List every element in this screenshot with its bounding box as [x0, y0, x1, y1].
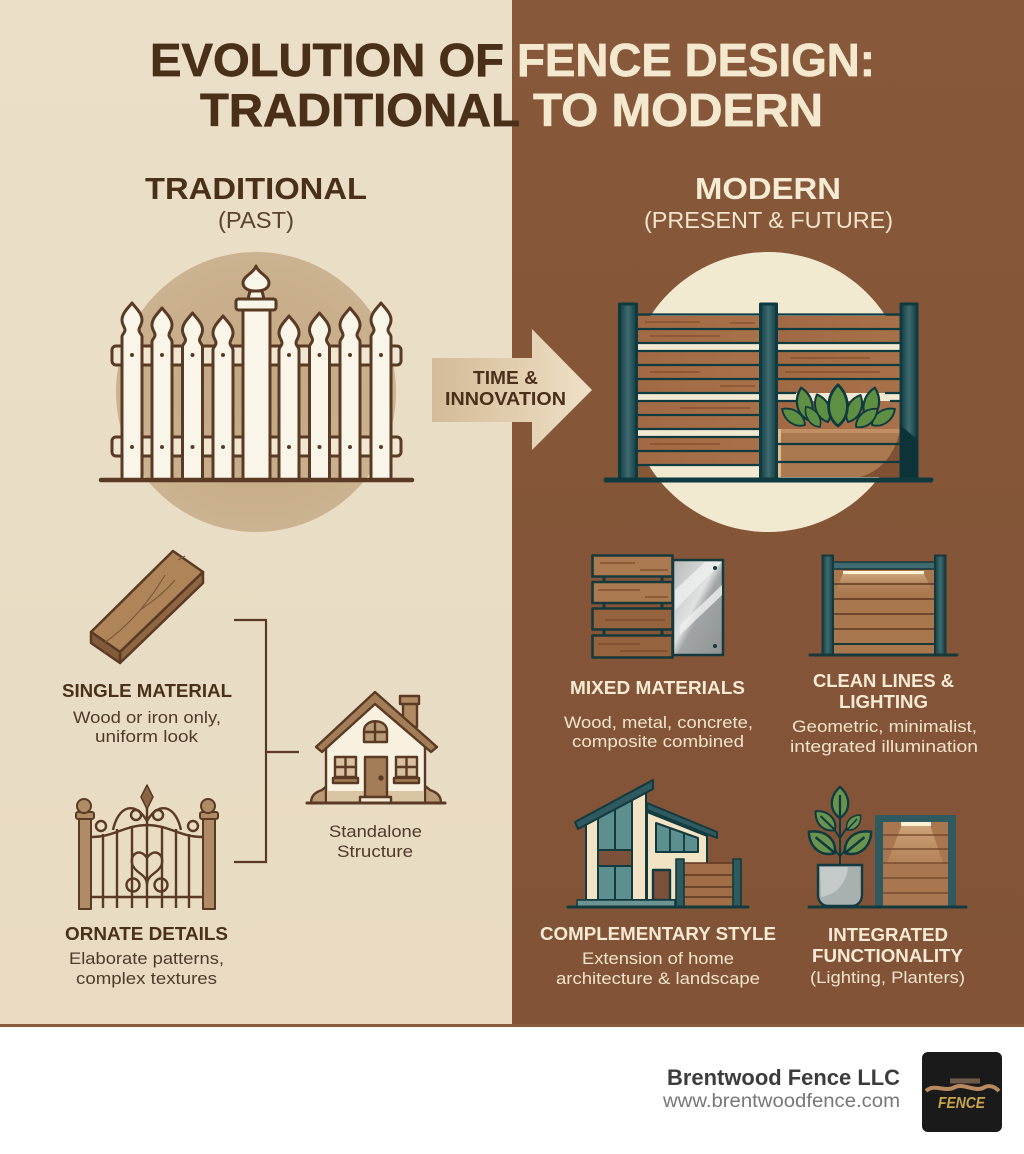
title	[150, 34, 875, 136]
heading: modern	[644, 171, 893, 233]
planks grain	[645, 322, 880, 444]
label: standalone structure: Structure	[337, 843, 413, 861]
heading: traditional: (PAST)	[218, 207, 294, 233]
title: EVOLUTION OF	[150, 34, 504, 86]
icon: clean lines and lighting	[810, 556, 957, 655]
bracket connector	[234, 620, 299, 862]
plant leaves	[778, 385, 899, 432]
title: TRADITIONAL	[200, 84, 520, 136]
label: single material: Wood or iron only,	[73, 709, 221, 727]
label: single material	[62, 680, 232, 746]
arrow: time and innovation: TIME &	[473, 368, 538, 388]
wood slats	[636, 316, 901, 465]
panel: traditional background	[0, 0, 512, 1025]
title: FENCE DESIGN:	[517, 34, 875, 86]
pickets	[122, 266, 391, 480]
footer: logo	[922, 1052, 1002, 1132]
arrow: time and innovation	[432, 329, 592, 450]
arrow: time and innovation: INNOVATION	[445, 389, 566, 409]
posts	[620, 304, 917, 479]
illustration: traditional picket fence	[101, 252, 412, 532]
icon: ornate gate	[76, 785, 218, 909]
slat rails	[636, 314, 901, 465]
heading: modern: (PRESENT & FUTURE)	[644, 207, 893, 233]
label: standalone structure	[329, 823, 422, 861]
icon: modern house	[568, 780, 748, 907]
title: TO MODERN	[533, 84, 823, 136]
label: mixed materials	[564, 677, 753, 751]
icon: traditional house	[307, 692, 445, 803]
rails	[112, 346, 401, 456]
icon: wood plank	[91, 551, 203, 663]
footer background	[0, 1027, 1024, 1154]
label: ornate details	[65, 923, 228, 988]
label: complementary style: COMPLEMENTARY STYLE	[540, 923, 776, 944]
icon: planter and lit fence	[803, 787, 966, 907]
label: clean lines and lighting: LIGHTING	[839, 691, 928, 712]
label: integrated functionality	[810, 924, 965, 987]
footer: company name: www.brentwoodfence.com	[662, 1091, 900, 1112]
central post	[243, 310, 270, 480]
label: ornate details: complex textures	[76, 970, 217, 988]
heading: traditional: TRADITIONAL	[145, 171, 367, 206]
label: clean lines and lighting: integrated illumination	[790, 738, 978, 756]
label: integrated functionality: (Lighting, Planters)	[810, 969, 965, 987]
label: ornate details: ORNATE DETAILS	[65, 923, 228, 944]
heading: traditional	[145, 171, 367, 233]
label: integrated functionality: INTEGRATED	[828, 924, 948, 945]
footer: company name: Brentwood Fence LLC	[667, 1065, 900, 1090]
footer: logo: FENCE	[938, 1095, 986, 1112]
label: single material: SINGLE MATERIAL	[62, 680, 232, 701]
label: clean lines and lighting: Geometric, minimalist,	[792, 718, 977, 736]
label: mixed materials: composite combined	[572, 733, 744, 751]
label: complementary style: Extension of home	[582, 950, 734, 968]
illustration: modern fence	[606, 252, 931, 532]
label: mixed materials: MIXED MATERIALS	[570, 677, 745, 698]
label: complementary style	[540, 923, 776, 988]
label: mixed materials: Wood, metal, concrete,	[564, 714, 753, 732]
footer: company name	[662, 1065, 900, 1112]
picket dots	[130, 353, 383, 449]
label: standalone structure: Standalone	[329, 823, 422, 841]
label: clean lines and lighting: CLEAN LINES &	[813, 670, 954, 691]
label: clean lines and lighting	[790, 670, 978, 756]
heading: modern: MODERN	[695, 171, 841, 206]
label: ornate details: Elaborate patterns,	[69, 950, 224, 968]
label: integrated functionality: FUNCTIONALITY	[812, 945, 964, 966]
label: single material: uniform look	[95, 728, 199, 746]
label: complementary style: architecture & landscape	[556, 970, 760, 988]
planter	[777, 429, 900, 477]
panel: modern background	[512, 0, 1024, 1025]
icon: mixed materials	[592, 556, 723, 658]
